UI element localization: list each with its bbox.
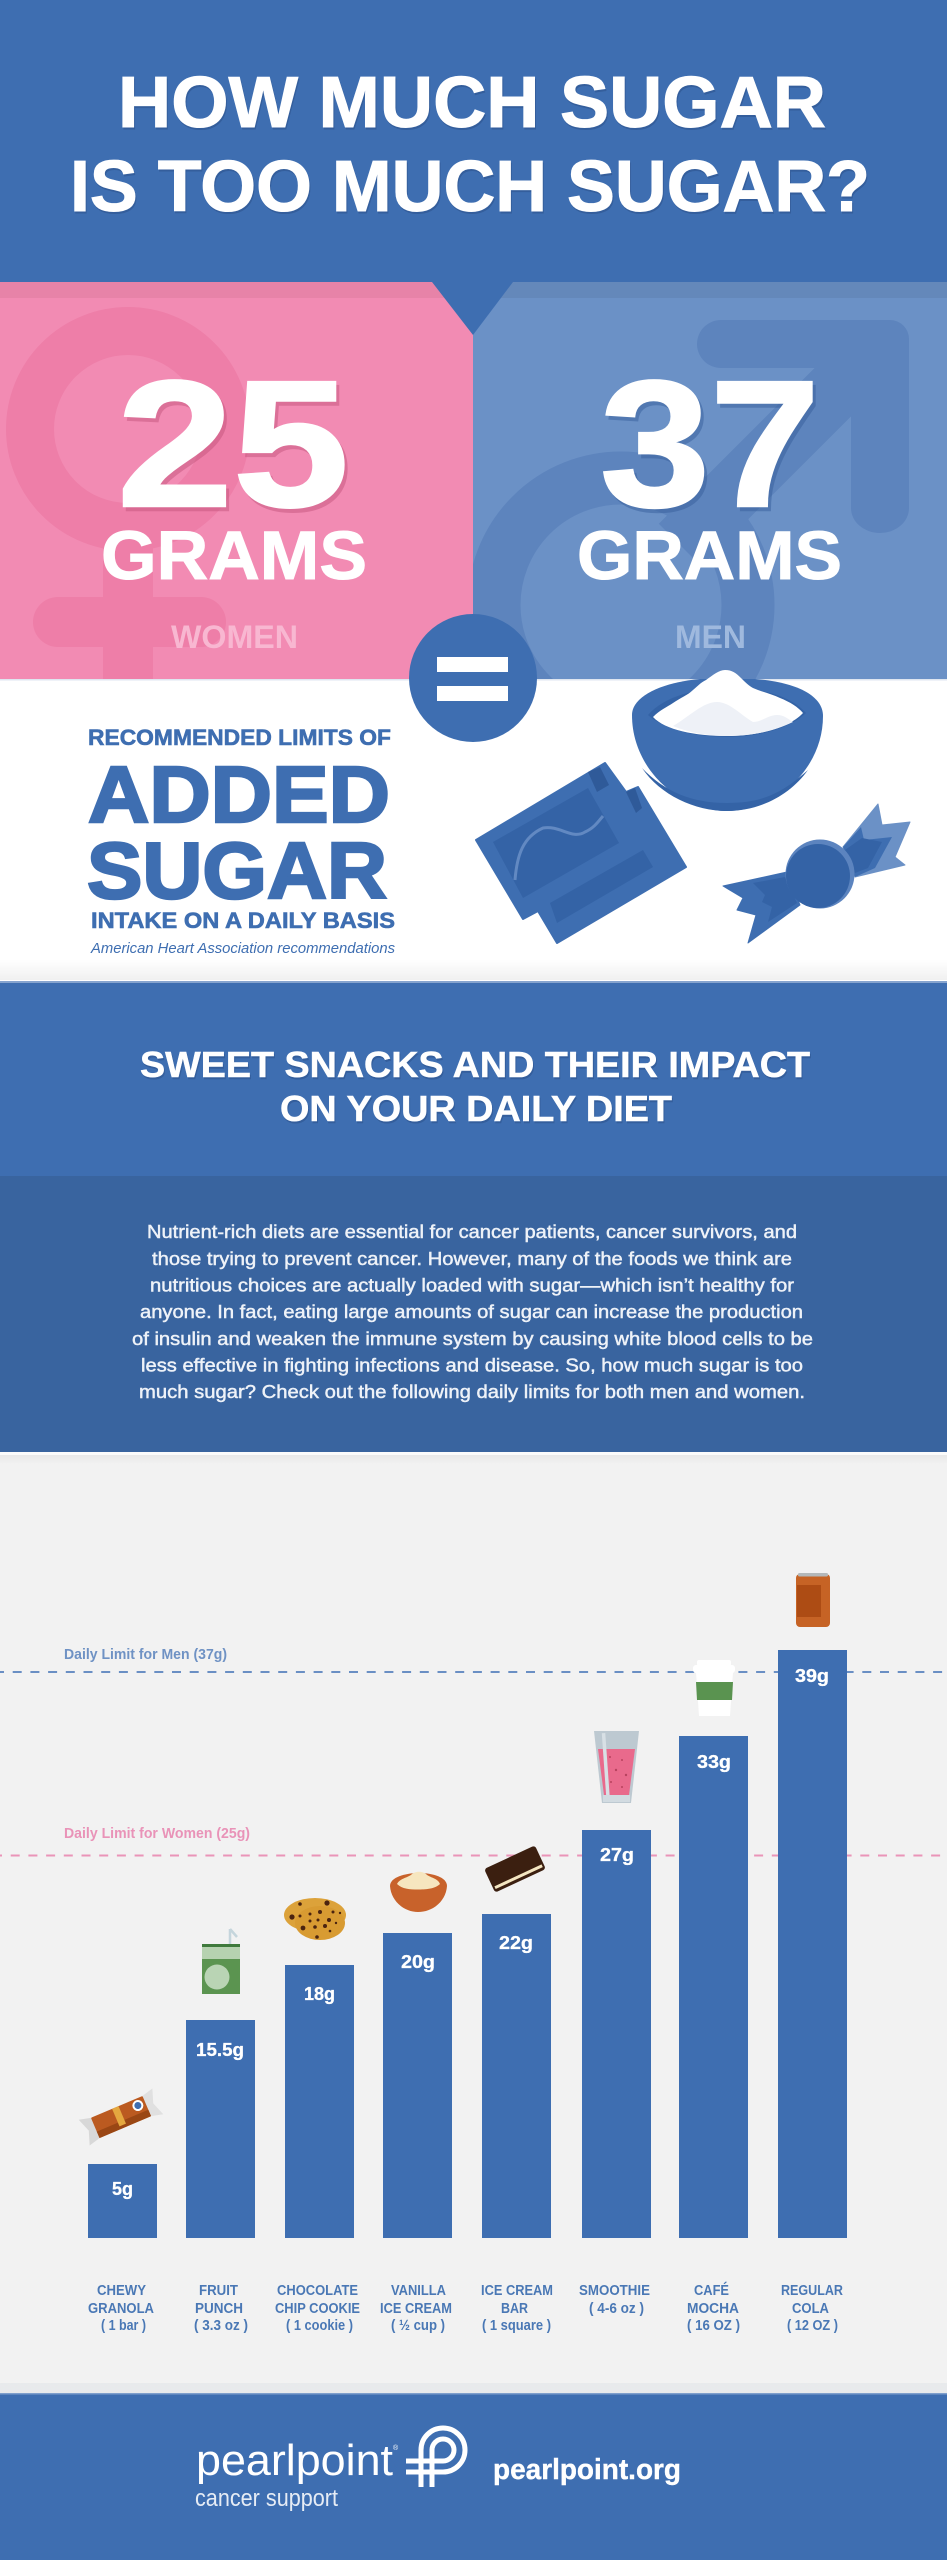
bar: chocolate chip cookie: 18g [304,1984,335,2004]
label: cafe mocha [687,2282,740,2334]
added sugar text: RECOMMENDED LIMITS OF [88,725,391,750]
label: fruit punch: ( 3.3 oz ) [194,2318,248,2334]
icon: ice cream sandwich bar [484,1845,546,1893]
arrow: header notch [432,282,513,335]
bar: ice cream bar: 22g [499,1933,533,1953]
label: chewy granola: GRANOLA [88,2301,154,2317]
bar: fruit punch [186,2020,255,2238]
added sugar text: INTAKE ON A DAILY BASIS [91,908,395,933]
added sugar text: American Heart Association recommendations [90,941,395,957]
label: fruit punch [194,2283,248,2334]
label: regular cola [781,2283,843,2334]
body copy: nutritious choices are actually loaded with sugar—which isn’t healthy for [150,1276,794,1296]
bar: cafe mocha [679,1736,748,2238]
icon: smoothie glass [594,1731,639,1803]
label: chewy granola: CHEWY [97,2283,146,2299]
bar: chewy granola: 5g [112,2179,133,2199]
panel: footer [0,2393,947,2560]
panel: sweet snacks heading [0,981,947,1176]
icon: granola bar [79,2088,163,2146]
label: regular cola: COLA [792,2301,829,2317]
label: fruit punch: FRUIT [199,2283,238,2299]
icon: wrapped candy [723,804,910,943]
icon: equals badge [409,614,537,742]
label: vanilla ice cream: ICE CREAM [380,2301,452,2317]
icon: sugar bowl [632,670,823,811]
panel: chart [0,1452,947,2393]
bar: chocolate chip cookie [285,1965,354,2238]
bar: cafe mocha: 33g [697,1752,731,1772]
body copy: Nutrient-rich diets are essential for cancer patients, cancer survivors, and [147,1222,797,1242]
added sugar text [87,725,395,957]
men grams: GRAMS [577,517,842,594]
limit line: men: Daily Limit for Men (37g) [64,1646,227,1663]
icon: pearlpoint logo mark [406,2428,465,2487]
added sugar text: SUGAR [87,826,387,915]
body copy: of insulin and weaken the immune system by causing white blood cells to be [132,1329,813,1349]
label: chocolate chip cookie [275,2283,360,2334]
label: regular cola: ( 12 OZ ) [787,2318,838,2334]
men grams: 37 [600,344,820,545]
bar: regular cola: 39g [795,1666,829,1686]
food labels [88,2282,843,2334]
title: HOW MUCH SUGAR [118,63,826,143]
men label: MEN [675,619,746,655]
title: IS TOO MUCH SUGAR? [70,147,870,227]
logo wordmark [195,2436,399,2512]
icon: chocolate chip cookie [284,1898,346,1940]
label: ice cream bar: ICE CREAM [481,2283,553,2299]
label: cafe mocha: CAFÉ [694,2282,729,2299]
label: fruit punch: PUNCH [195,2301,243,2317]
women grams [101,344,367,594]
label: ice cream bar: ( 1 square ) [482,2318,551,2334]
body copy: those trying to prevent cancer. However, many of the foods we think are [152,1249,792,1269]
panel: added sugar [0,614,947,982]
label: chocolate chip cookie: CHOCOLATE [277,2283,358,2299]
men grams [577,344,842,594]
icon: cola can [796,1573,830,1627]
label: chocolate chip cookie: CHIP COOKIE [275,2301,360,2317]
label: regular cola: REGULAR [781,2283,843,2299]
icon: female symbol [30,331,226,679]
bar: vanilla ice cream: 20g [401,1952,435,1972]
label: vanilla ice cream [380,2283,452,2334]
icon: coffee cup [693,1660,735,1716]
body copy [132,1222,813,1402]
bar: fruit punch: 15.5g [196,2040,244,2060]
panel: women [0,282,473,679]
panel: intro text [0,1176,947,1452]
women grams: 25 [117,344,349,545]
label: vanilla ice cream: ( ½ cup ) [391,2318,445,2334]
section heading: SWEET SNACKS AND THEIR IMPACT [140,1044,810,1085]
website: pearlpoint.org [493,2454,681,2486]
limit line: women: Daily Limit for Women (25g) [64,1825,250,1842]
body copy: less effective in fighting infections and disease. So, how much sugar is too [141,1356,803,1376]
label: ice cream bar: BAR [501,2301,528,2317]
women grams: GRAMS [101,517,367,594]
icon: juice box [202,1929,240,1994]
added sugar text: ADDED [88,750,390,839]
section heading [140,1044,810,1129]
label: cafe mocha: ( 16 OZ ) [687,2318,740,2334]
section heading: ON YOUR DAILY DIET [280,1088,672,1129]
women label: WOMEN [171,619,298,655]
panel: header [0,0,947,282]
bar: regular cola [778,1650,847,2238]
icon: male symbol [494,320,909,732]
label: chocolate chip cookie: ( 1 cookie ) [286,2318,353,2334]
label: chewy granola: ( 1 bar ) [101,2318,146,2334]
label: chewy granola [88,2283,154,2334]
label: cafe mocha: MOCHA [687,2301,739,2317]
body copy: much sugar? Check out the following daily limits for both men and women. [139,1382,805,1402]
bar: chewy granola [88,2164,157,2238]
icon: sugar sachets [476,763,686,943]
bar: smoothie [582,1830,651,2238]
body copy: anyone. In fact, eating large amounts of sugar can increase the production [140,1302,803,1322]
panel: men [473,282,947,679]
icon: vanilla ice cream bowl [390,1872,447,1912]
label: smoothie: ( 4-6 oz ) [589,2301,644,2317]
title [70,63,870,227]
label: vanilla ice cream: VANILLA [391,2283,446,2299]
label: smoothie [579,2283,650,2317]
logo wordmark: pearlpoint [196,2436,393,2485]
label: ice cream bar [481,2283,553,2334]
bar: ice cream bar [482,1914,551,2238]
logo wordmark: cancer support [195,2485,338,2512]
bar: smoothie: 27g [600,1845,634,1865]
label: smoothie: SMOOTHIE [579,2283,650,2299]
logo wordmark: ® [393,2444,399,2452]
bar: vanilla ice cream [383,1933,452,2238]
